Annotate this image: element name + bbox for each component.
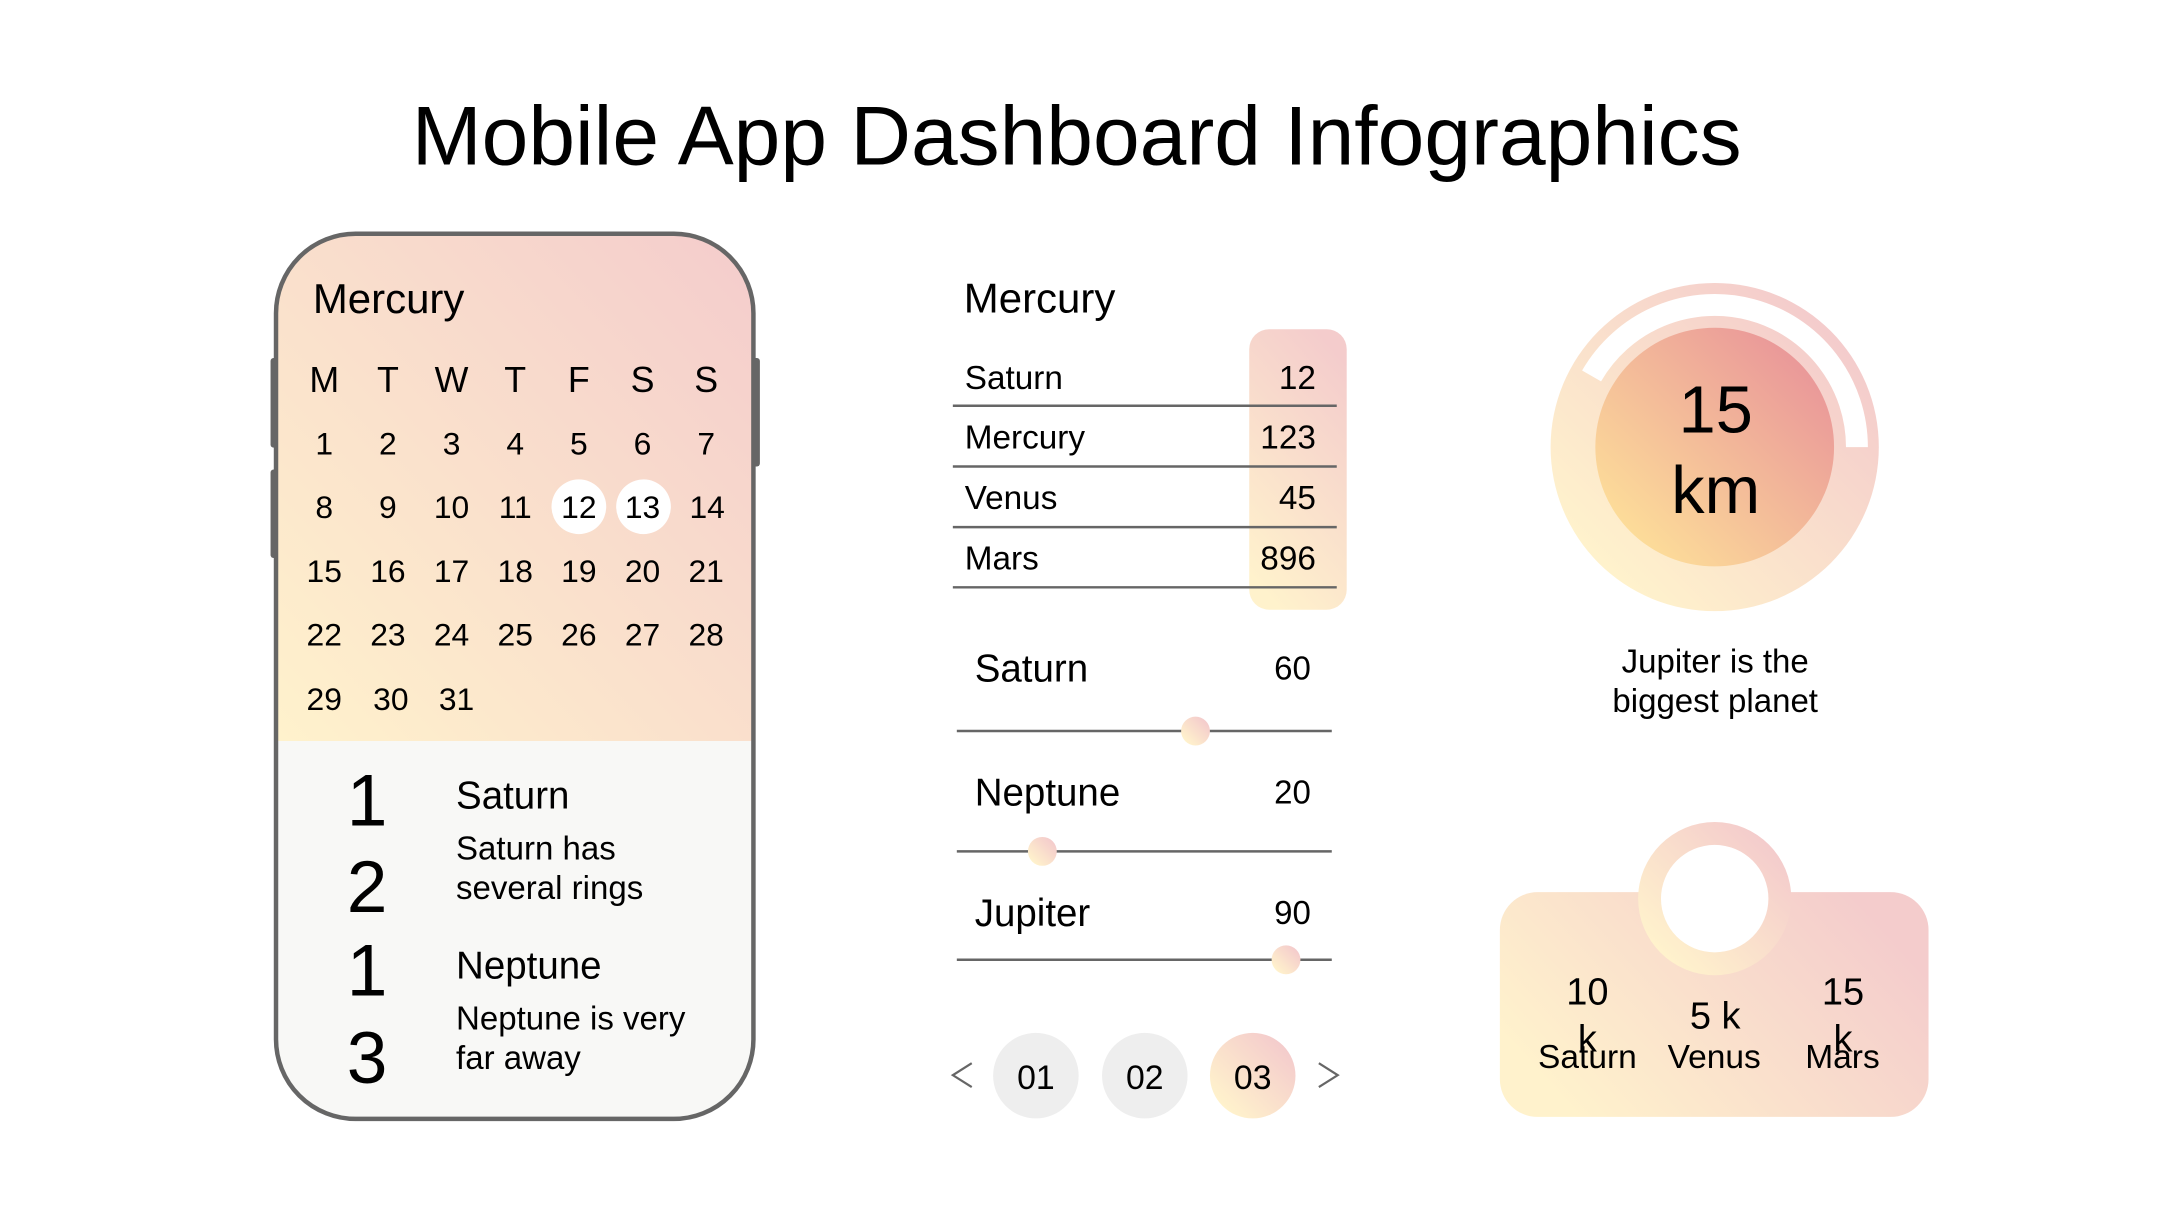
stat: Venus xyxy=(1668,995,1761,1076)
calendar dates: 2 xyxy=(379,426,397,462)
table labels: Saturn xyxy=(965,360,1063,397)
calendar dates: 7 xyxy=(697,426,715,462)
table heading: Mercury xyxy=(964,274,1115,321)
gauge outer ring xyxy=(1551,283,1879,611)
gauge inner disc xyxy=(1595,328,1834,566)
gauge white progress arc xyxy=(1592,305,1857,447)
calendar heading: Mercury xyxy=(313,275,464,322)
phone screen xyxy=(276,234,753,1119)
table row lines xyxy=(953,406,1337,587)
card ring hole xyxy=(1661,845,1768,952)
calendar dates: 18 xyxy=(498,553,533,589)
slider: Neptune: 20 xyxy=(1274,774,1311,811)
stat: Mars: 15 xyxy=(1822,972,1864,1014)
calendar dates: 17 xyxy=(434,553,469,589)
stat: Venus: Venus xyxy=(1668,1039,1761,1076)
title: Mobile App Dashboard Infographics xyxy=(412,89,1742,183)
calendar dates: 23 xyxy=(370,616,406,652)
calendar dates: 1 xyxy=(315,426,333,462)
calendar dates: 12 xyxy=(561,489,597,525)
table labels: Mercury xyxy=(965,420,1085,457)
table values: 896 xyxy=(1260,540,1316,577)
event: Neptune: Neptune xyxy=(456,945,602,988)
event date 13: 3 xyxy=(347,1018,387,1099)
calendar dates: 5 xyxy=(570,426,588,462)
event: Saturn: Saturn xyxy=(456,775,569,818)
table labels: Mars xyxy=(965,540,1039,577)
stat: Saturn xyxy=(1538,972,1637,1076)
calendar dates: 11 xyxy=(499,489,532,525)
panel: pagination xyxy=(953,1033,1338,1118)
calendar weekdays: W xyxy=(435,360,469,400)
gauge value xyxy=(1671,374,1760,528)
event date 13 xyxy=(347,931,387,1099)
highlighted value column xyxy=(1249,329,1347,610)
table labels: Venus xyxy=(965,480,1057,517)
gauge value: 15 xyxy=(1679,374,1753,448)
stat: Saturn: Saturn xyxy=(1538,1039,1637,1076)
table values: 12 xyxy=(1279,360,1316,397)
gauge caption xyxy=(1612,642,1818,719)
calendar dates: 25 xyxy=(498,616,533,652)
calendar dates: 20 xyxy=(625,553,660,589)
panel: sliders xyxy=(957,647,1332,974)
slider: Saturn: Saturn xyxy=(975,647,1088,690)
stat: Mars: Mars xyxy=(1805,1039,1880,1076)
slider: Neptune: Neptune xyxy=(975,772,1120,815)
slider: Jupiter: Jupiter xyxy=(975,892,1090,935)
phone outline xyxy=(276,234,753,1119)
stat: Mars xyxy=(1805,972,1880,1076)
calendar dates: 15 xyxy=(307,553,342,589)
calendar weekdays: T xyxy=(504,360,526,400)
table values: 123 xyxy=(1260,420,1316,457)
slider: Saturn: 60 xyxy=(1274,649,1311,686)
calendar dates: 24 xyxy=(434,616,469,652)
event: Neptune: far away xyxy=(456,1039,581,1076)
calendar weekdays: F xyxy=(568,360,590,400)
arrow: next xyxy=(1319,1063,1338,1087)
calendar dates: 22 xyxy=(307,616,342,652)
card background xyxy=(1500,892,1929,1117)
calendar dates: 19 xyxy=(561,553,597,589)
page 01: 01 xyxy=(1017,1059,1055,1097)
page 01 xyxy=(993,1033,1079,1118)
calendar dates: 8 xyxy=(315,489,333,525)
calendar dates: 27 xyxy=(625,616,660,652)
stat: Venus: 5 k xyxy=(1690,995,1742,1037)
panel: phone calendar xyxy=(271,234,760,1119)
gauge caption: biggest planet xyxy=(1612,682,1818,719)
panel: stats card xyxy=(1500,822,1929,1117)
card ring xyxy=(1638,822,1791,975)
calendar dates: 31 xyxy=(439,681,474,717)
calendar weekdays: T xyxy=(377,360,399,400)
phone side buttons xyxy=(271,358,760,558)
event: Neptune: Neptune is very xyxy=(456,999,686,1036)
gauge caption: Jupiter is the xyxy=(1622,642,1809,679)
arrow: previous xyxy=(953,1063,972,1087)
calendar dates: 3 xyxy=(443,426,460,462)
calendar dates: 4 xyxy=(506,426,524,462)
table labels xyxy=(965,360,1085,577)
slider: Jupiter xyxy=(957,892,1332,974)
calendar dates: 16 xyxy=(370,553,406,589)
calendar dates: 6 xyxy=(634,426,651,462)
stat: Mars: k xyxy=(1834,1018,1854,1060)
panel: distance gauge xyxy=(1551,283,1879,719)
calendar dates: 14 xyxy=(689,489,725,525)
event date 12 xyxy=(347,761,387,928)
event: Neptune xyxy=(456,945,686,1076)
calendar weekdays: M xyxy=(309,360,339,400)
event: Saturn: Saturn has xyxy=(456,829,616,866)
calendar weekdays: S xyxy=(694,360,718,400)
slider: Jupiter: 90 xyxy=(1274,894,1311,931)
calendar dates: 29 xyxy=(307,681,342,717)
event date 12: 1 xyxy=(347,761,387,842)
calendar dates: 9 xyxy=(379,489,397,525)
page 03 active: 03 xyxy=(1234,1059,1272,1097)
gauge value: km xyxy=(1671,454,1760,528)
table values xyxy=(1260,360,1316,577)
calendar dates xyxy=(307,426,725,717)
calendar dates: 10 xyxy=(434,489,469,525)
page 03 active xyxy=(1210,1033,1295,1118)
calendar weekdays: S xyxy=(631,360,654,400)
event: Saturn xyxy=(456,775,643,906)
calendar dates: 21 xyxy=(688,553,724,589)
slider: Saturn xyxy=(957,647,1332,745)
stat: Saturn: k xyxy=(1578,1018,1598,1060)
calendar dates: 26 xyxy=(561,616,597,652)
panel: table xyxy=(953,274,1347,610)
calendar dates: 30 xyxy=(373,681,409,717)
calendar dates: 28 xyxy=(688,616,724,652)
event date 13: 1 xyxy=(347,931,387,1012)
highlighted dates xyxy=(552,479,671,534)
calendar weekdays xyxy=(309,360,718,400)
calendar dates: 13 xyxy=(625,489,660,525)
page 02 xyxy=(1102,1033,1188,1118)
event date 12: 2 xyxy=(347,847,387,928)
page 02: 02 xyxy=(1126,1059,1164,1097)
slider: Neptune xyxy=(957,772,1332,866)
stat: Saturn: 10 xyxy=(1566,972,1609,1014)
event: Saturn: several rings xyxy=(456,869,643,906)
table values: 45 xyxy=(1279,480,1316,517)
